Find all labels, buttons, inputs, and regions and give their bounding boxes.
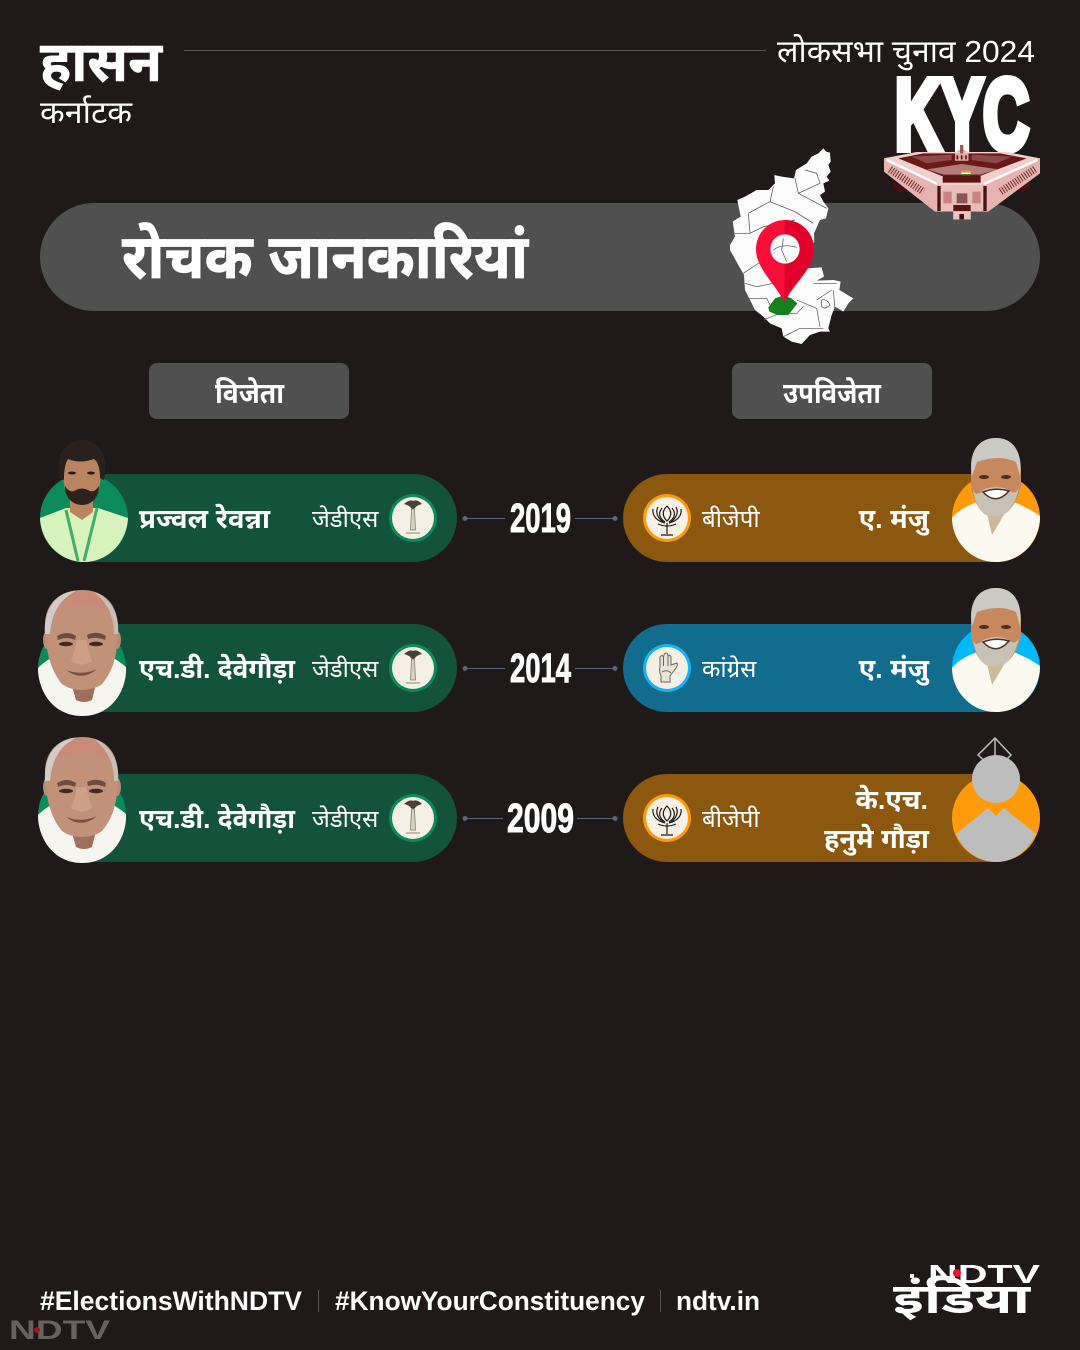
portrait: H.D. Deve Gowda [38, 737, 126, 863]
icon: parliament building [884, 145, 1040, 219]
column heading: winner: विजेता [215, 376, 284, 410]
KYC logo [884, 59, 1040, 219]
row 2019: winner pill: जेडीएस [312, 505, 379, 533]
row 2009: runner-up pill: हनुमे गौड़ा [824, 823, 930, 855]
place heading: हासन [40, 30, 164, 93]
row 2014: year [462, 645, 618, 691]
portrait: H.D. Deve Gowda [38, 590, 126, 716]
column heading: runner-up: उपविजेता [783, 376, 881, 410]
row 2009: year: 2009 [507, 795, 574, 841]
row 2019: winner pill [40, 440, 457, 562]
row 2009: winner pill [38, 737, 457, 863]
row 2014: year: 2014 [510, 645, 571, 691]
icon: BJP lotus [643, 494, 691, 542]
footer hashtags: #KnowYourConstituency [335, 1286, 645, 1316]
row 2019: winner pill: प्रज्वल रेवन्ना [139, 503, 271, 534]
row 2019: runner-up pill: ए. मंजु [859, 504, 930, 535]
row 2009: runner-up pill: के.एच. [855, 784, 928, 815]
map: Karnataka with pin [730, 148, 853, 344]
column heading: winner [149, 363, 349, 419]
banner: interesting facts: रोचक जानकारियां [122, 222, 530, 292]
portrait: A. Manju [952, 438, 1040, 562]
column heading: runner-up [732, 363, 932, 419]
row 2009: runner-up pill: बीजेपी [702, 805, 760, 833]
logo: NDTV India: NDTV [928, 1259, 1041, 1289]
row 2009: year [462, 795, 618, 841]
row 2014: winner pill [38, 590, 457, 716]
row 2014: winner pill: जेडीएस [312, 655, 379, 683]
row 2009: winner pill: जेडीएस [312, 805, 379, 833]
row 2014: winner pill: एच.डी. देवेगौड़ा [139, 653, 296, 684]
place heading: कर्नाटक [40, 95, 133, 130]
row 2009: runner-up pill [623, 738, 1040, 862]
election title: लोकसभा चुनाव 2024 [777, 34, 1035, 70]
portrait: placeholder silhouette [952, 738, 1040, 862]
footer hashtags: #ElectionsWithNDTV [40, 1286, 302, 1316]
row 2014: runner-up pill [623, 588, 1040, 712]
portrait: A. Manju [952, 588, 1040, 712]
footer hashtags: ndtv.in [676, 1286, 760, 1316]
footer hashtags [40, 1286, 760, 1316]
logo: NDTV watermark: NDTV [9, 1315, 110, 1345]
row 2009: winner pill: एच.डी. देवेगौड़ा [139, 803, 296, 834]
row 2014: runner-up pill: ए. मंजु [859, 654, 930, 685]
logo: NDTV India: इंडिया [893, 1275, 1031, 1322]
row 2019: year: 2019 [510, 495, 571, 541]
icon: JDS symbol [389, 494, 437, 542]
icon: location pin [756, 220, 814, 302]
row 2019: year [462, 495, 618, 541]
banner: interesting facts [40, 203, 1040, 311]
row 2019: runner-up pill: बीजेपी [702, 505, 760, 533]
place heading [40, 30, 164, 130]
row 2014: runner-up pill: कांग्रेस [702, 655, 757, 683]
portrait: Prajwal Revanna [40, 440, 128, 562]
icon: JDS symbol [389, 644, 437, 692]
logo: NDTV India [893, 1259, 1041, 1322]
icon: JDS symbol [389, 794, 437, 842]
icon: BJP lotus [643, 794, 691, 842]
row 2019: runner-up pill [623, 438, 1040, 562]
icon: Congress hand [643, 644, 691, 692]
